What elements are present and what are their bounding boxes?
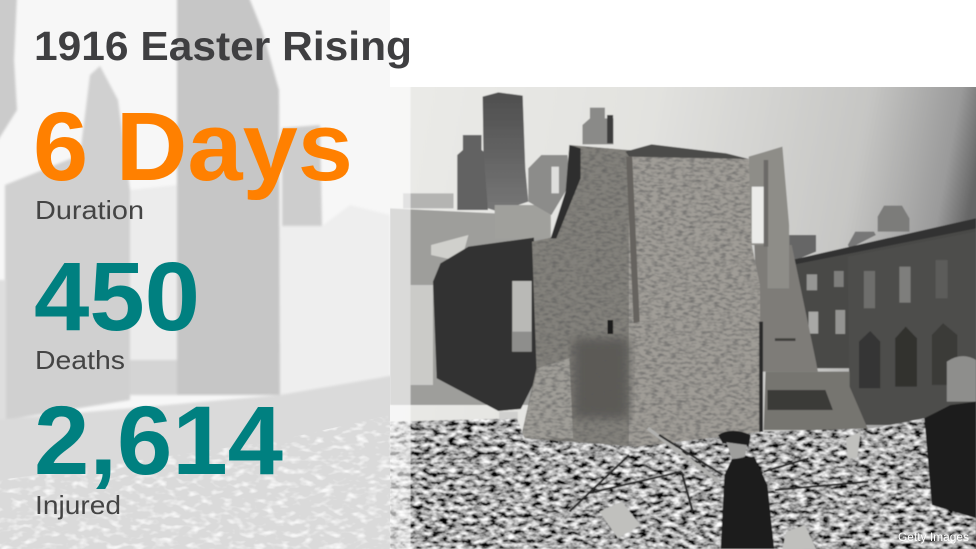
- right-hand terrace: [789, 206, 976, 425]
- twisted metal debris: [569, 428, 868, 512]
- stat: deaths: [34, 242, 200, 375]
- figure: 2,614: 2,614: [34, 386, 283, 495]
- rear buildings: [390, 92, 613, 405]
- main photograph: ruined building: [386, 82, 976, 549]
- pillar and open window: [749, 147, 789, 288]
- sky: [386, 82, 976, 549]
- pale blocks: [599, 432, 861, 549]
- faded background photo: [0, 0, 395, 549]
- wall details: [551, 144, 763, 438]
- dark figure at right: [924, 402, 976, 518]
- label: injured: Injured: [35, 490, 121, 520]
- right buttress and steps: [754, 245, 868, 430]
- stat: duration: [33, 92, 353, 225]
- figure: 450: 450: [34, 242, 200, 351]
- label: duration: Duration: [35, 195, 144, 225]
- photo credit: Getty Images: [898, 532, 969, 544]
- burnt-out interior: [433, 238, 541, 420]
- figure: 6 days: 6 Days: [33, 92, 353, 201]
- title: 1916 Easter Rising: [34, 23, 412, 69]
- stat: injured: [34, 386, 283, 520]
- faded left edge of photo: [390, 87, 412, 549]
- rubble field: [390, 412, 976, 549]
- main brick wall: [517, 142, 764, 452]
- man in dark coat: [718, 431, 774, 549]
- label: deaths: Deaths: [35, 345, 125, 375]
